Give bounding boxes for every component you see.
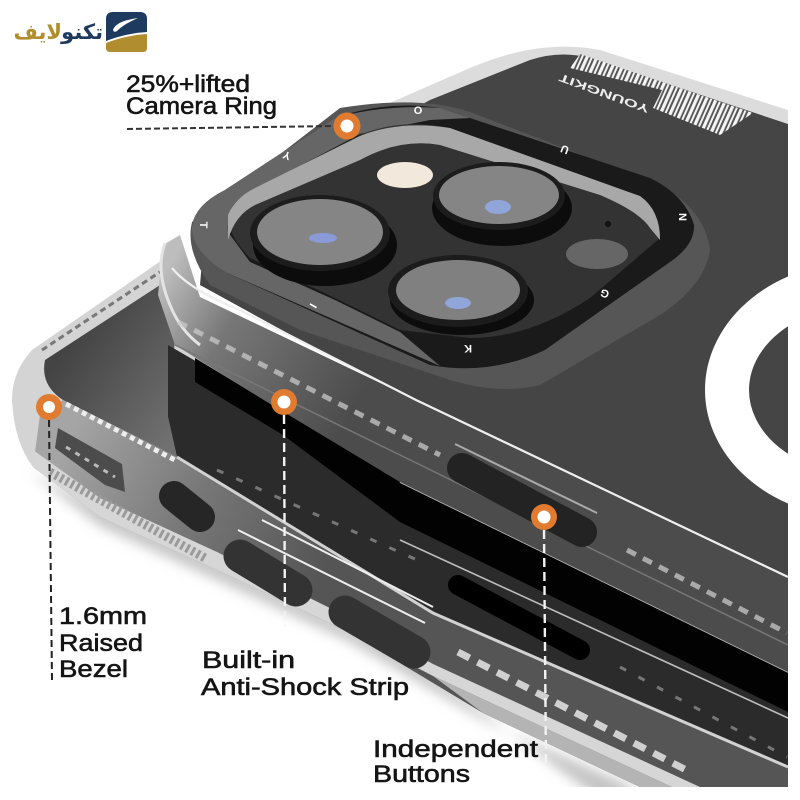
lower case inner rim	[44, 285, 177, 457]
microphone	[605, 221, 611, 227]
strip leader	[284, 415, 285, 626]
lower case side band	[33, 400, 788, 787]
buttons leader	[544, 530, 546, 766]
lower case silver edge	[33, 450, 700, 787]
camera ring text: Camera Ring	[126, 93, 277, 120]
barcode	[557, 54, 753, 135]
label: anti-shock strip	[201, 389, 409, 701]
lower port	[174, 496, 200, 517]
barcode text: YOUNGKIT	[557, 71, 651, 114]
silver texture	[50, 472, 205, 558]
black reflection band	[195, 358, 788, 712]
camera ring	[192, 105, 694, 368]
logo	[13, 12, 147, 52]
lens three	[388, 255, 534, 335]
ring gray face	[192, 107, 470, 366]
magnetic ring	[727, 284, 800, 496]
ring inner wall	[228, 125, 660, 240]
ring letters	[197, 105, 688, 354]
reflection area	[168, 345, 788, 767]
lower phone case body	[12, 262, 237, 467]
camera ring leader	[127, 126, 335, 129]
strip text: Anti-Shock Strip	[201, 674, 409, 701]
back surface	[200, 54, 788, 577]
bezel text: 1.6mm	[59, 603, 147, 630]
ring letters: K	[464, 342, 472, 354]
bezel leader	[49, 420, 52, 680]
reflected strip dashes	[217, 470, 787, 757]
logo mark blue	[106, 12, 147, 41]
buttons marker	[531, 504, 557, 530]
logo mark swoosh	[113, 18, 138, 32]
upper side line	[175, 345, 788, 645]
strip text: Built-in	[202, 647, 295, 674]
barcode bars	[570, 54, 753, 135]
ring letters: T	[197, 222, 209, 229]
reflected black pill	[458, 585, 580, 650]
camera bumper	[190, 102, 710, 389]
bumper clear edge	[161, 243, 200, 345]
ring letters: Y	[281, 148, 292, 162]
upper phone side band	[158, 235, 788, 672]
ring opening	[228, 124, 660, 338]
reflection white lines	[400, 482, 788, 718]
left case dark panel	[55, 428, 125, 492]
label: independent buttons	[373, 504, 557, 788]
upper side top white line	[172, 268, 788, 577]
logo mark gold	[106, 34, 147, 52]
logo text blue: تکنو	[60, 20, 103, 44]
lower case bright line	[177, 457, 788, 767]
bezel text: Raised	[59, 630, 143, 657]
ring letters: I	[307, 301, 319, 310]
upper side strip dashes	[178, 322, 787, 633]
shadow under lower case	[30, 472, 640, 800]
lower case top bezel dashes	[42, 272, 160, 350]
upper button highlight	[455, 444, 597, 513]
lower case shadow strip	[433, 676, 672, 787]
back frame	[385, 47, 788, 130]
label: raised bezel	[36, 394, 147, 683]
buttons text: Independent	[373, 736, 538, 763]
ring letters: G	[599, 286, 611, 300]
camera ring marker	[334, 112, 360, 140]
ring letters: U	[559, 142, 571, 156]
bezel text: Bezel	[59, 656, 128, 683]
lower button two	[345, 612, 414, 652]
strip marker	[271, 389, 297, 415]
camera ring text: 25%+lifted	[126, 71, 250, 98]
lower case strip ridges	[458, 652, 690, 772]
ring outer	[192, 106, 694, 368]
ring letters: O	[414, 105, 423, 117]
upper button	[462, 468, 582, 532]
button highlights	[238, 520, 433, 623]
bezel marker	[36, 394, 62, 420]
label: camera ring	[126, 71, 360, 140]
buttons text: Buttons	[373, 761, 470, 788]
lower case white rim dashes	[66, 404, 175, 460]
sensor	[566, 239, 628, 269]
logo text gold: لایف	[13, 20, 62, 44]
left panel dashes	[66, 447, 115, 477]
lower button one	[240, 556, 296, 590]
camera flash	[377, 162, 433, 188]
lens two	[432, 162, 572, 246]
ring letters: N	[676, 213, 688, 221]
lens one	[250, 195, 397, 286]
